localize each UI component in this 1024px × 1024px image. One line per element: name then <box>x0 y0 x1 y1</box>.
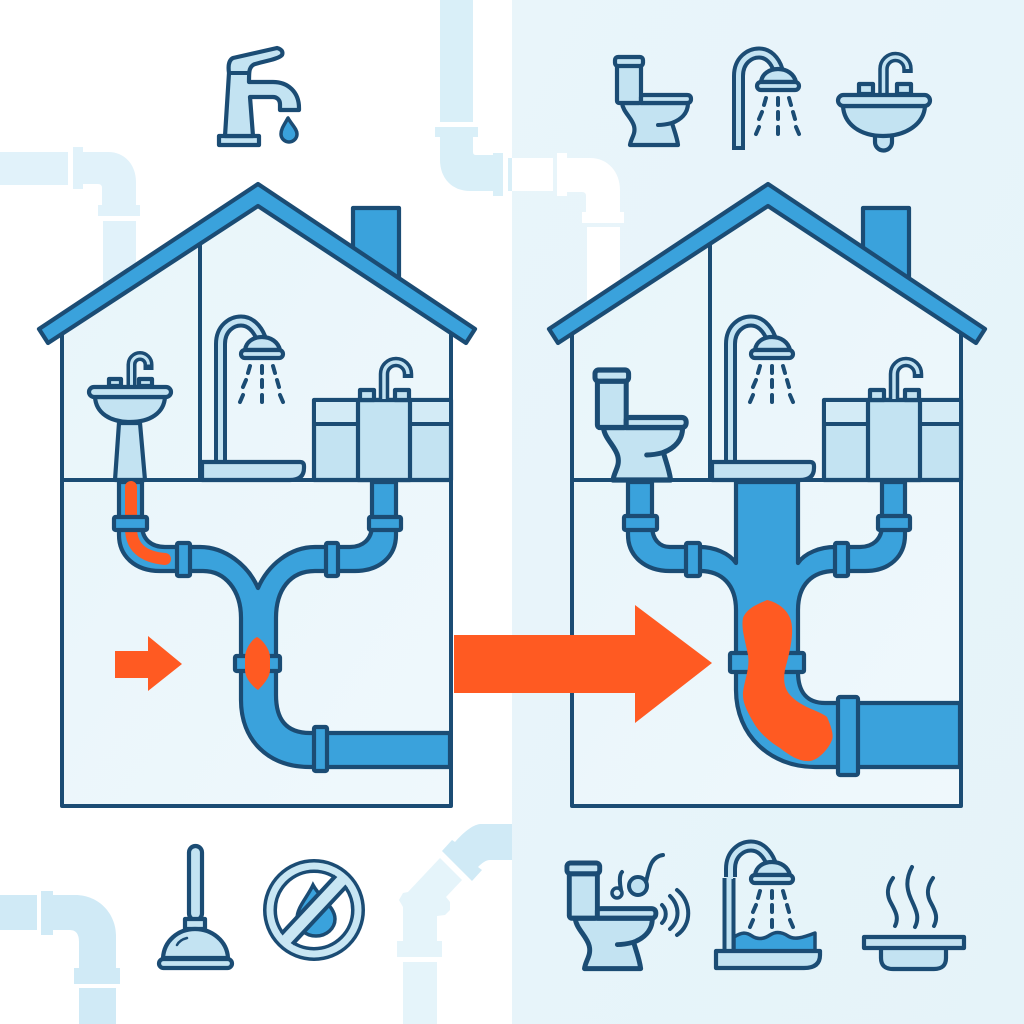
music notes <box>612 855 663 898</box>
icon: flooding shower <box>716 846 820 968</box>
icon: gurgling toilet <box>567 855 688 969</box>
vanity cabinets <box>824 362 961 480</box>
big arrow <box>454 605 712 723</box>
vanity cabinets <box>314 362 451 480</box>
sound waves <box>662 890 688 935</box>
icon: sewage smell from drain <box>864 867 964 969</box>
shower <box>712 321 814 480</box>
drain pipes with backed-up water and large clog <box>624 482 960 775</box>
background pipe: bottom left <box>0 891 120 1024</box>
background pipe: top center <box>435 0 624 302</box>
house structure <box>549 184 985 806</box>
house structure <box>39 184 475 806</box>
background: right panel <box>512 0 1024 1024</box>
pedestal sink <box>89 356 171 480</box>
drain pipes with small clog <box>114 482 450 771</box>
icon: dripping faucet <box>219 48 299 145</box>
icon: shower top <box>738 53 799 150</box>
small arrow <box>115 636 182 691</box>
toilet <box>595 370 686 480</box>
icon: toilet top <box>615 57 691 145</box>
icon: no water sign <box>270 866 358 954</box>
shower <box>202 321 304 480</box>
icon: sink top <box>838 57 930 150</box>
panel: house before (partial clog) <box>39 184 475 806</box>
panel: house after (severe clog) <box>549 184 985 806</box>
background pipe: top left <box>0 147 140 291</box>
background pipe: bottom center <box>397 824 512 1024</box>
icon: plunger <box>159 846 232 968</box>
